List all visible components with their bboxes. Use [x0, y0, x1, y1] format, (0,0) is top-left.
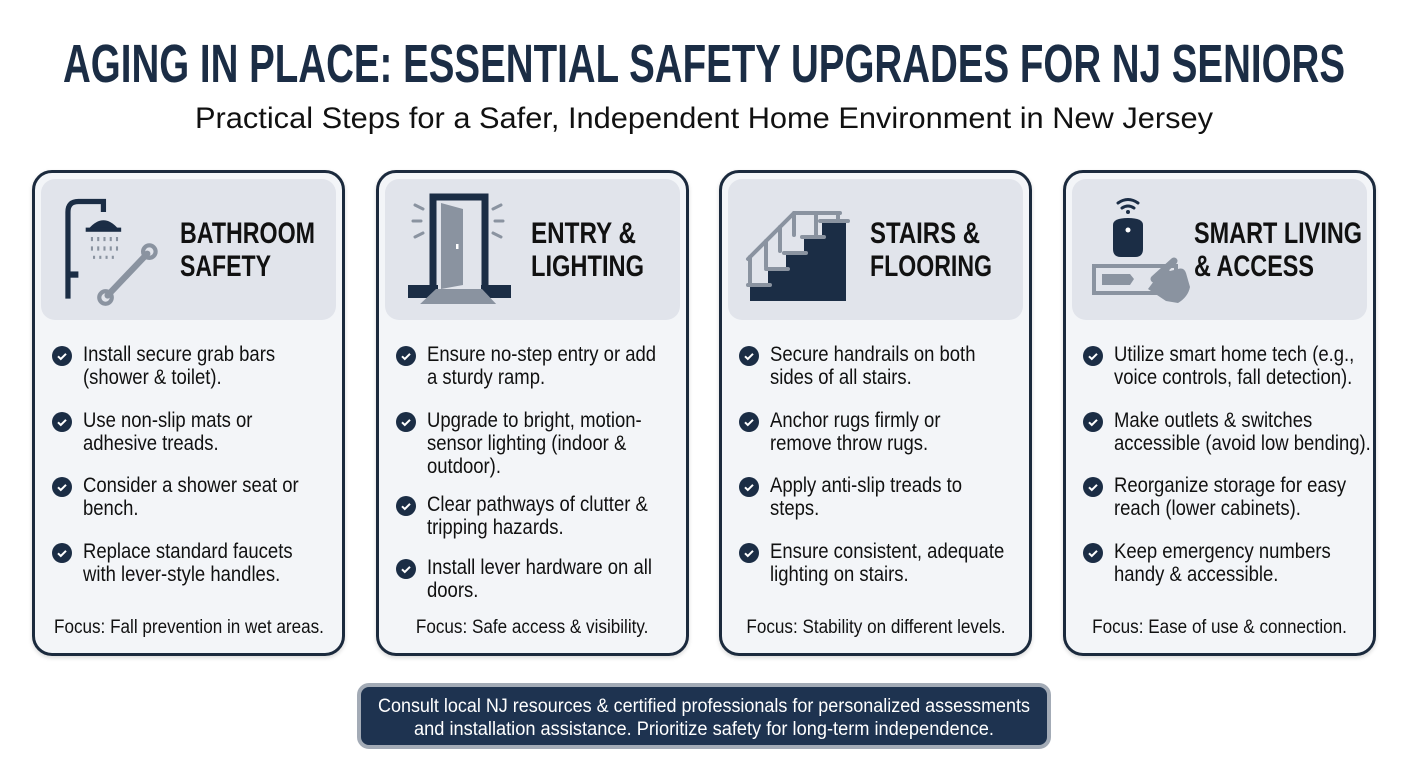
- callout banner: [357, 683, 1051, 749]
- icon: shower and grab bar: [65, 198, 158, 306]
- callout banner: and installation assistance. Prioritize safety for long-term independence.: [414, 719, 994, 740]
- bullet 1: [1083, 343, 1354, 389]
- bullet 1: [739, 343, 975, 389]
- bullet 1: Secure handrails on both: [770, 343, 975, 366]
- heading: bathroom safety: [180, 219, 315, 283]
- title: Practical Steps for a Safer, Independent Home Environment in New Jersey: [195, 102, 1213, 135]
- bullet 3: steps.: [770, 497, 819, 520]
- bullet 2: Anchor rugs firmly or: [770, 409, 940, 432]
- panel header: stairs: [728, 179, 1023, 320]
- bullet 3: Clear pathways of clutter &: [427, 493, 648, 516]
- icon: smart speaker and switch with hand: [1092, 198, 1190, 303]
- bullet 1: [396, 343, 656, 389]
- bullet 2: Use non-slip mats or: [83, 409, 252, 432]
- bullet 3: bench.: [83, 497, 138, 520]
- heading: stairs & flooring: [870, 219, 992, 283]
- bullet 2: Upgrade to bright, motion-: [427, 409, 642, 432]
- bullet 4: with lever-style handles.: [83, 563, 280, 586]
- panel: entry & lighting: [376, 170, 689, 656]
- bullet 2: adhesive treads.: [83, 432, 219, 455]
- bullet 4: Replace standard faucets: [83, 540, 293, 563]
- focus note: Focus: Safe access & visibility.: [416, 617, 649, 638]
- bullet 2: sensor lighting (indoor &: [427, 432, 626, 455]
- bullet 4: doors.: [427, 579, 478, 602]
- panel header: entry: [385, 179, 680, 320]
- callout banner: Consult local NJ resources & certified professionals for personalized assessments: [378, 696, 1030, 717]
- focus note: Focus: Ease of use & connection.: [1092, 617, 1347, 638]
- bullet 1: Install secure grab bars: [83, 343, 275, 366]
- bullet 4: [396, 556, 652, 602]
- bullet 2: accessible (avoid low bending).: [1114, 432, 1371, 455]
- bullet 4: handy & accessible.: [1114, 563, 1278, 586]
- bullet 4: [1083, 540, 1331, 586]
- bullet 3: [396, 493, 648, 539]
- heading: entry & lighting: [531, 219, 644, 283]
- icon: open door with light: [408, 194, 511, 304]
- bullet 4: [739, 540, 1004, 586]
- focus note: Focus: Fall prevention in wet areas.: [54, 617, 323, 638]
- bullet 4: Install lever hardware on all: [427, 556, 652, 579]
- bullet 2: [1083, 409, 1371, 455]
- bullet 1: voice controls, fall detection).: [1114, 366, 1352, 389]
- bullet 1: Ensure no-step entry or add: [427, 343, 656, 366]
- bullet 1: sides of all stairs.: [770, 366, 912, 389]
- bullet 1: (shower & toilet).: [83, 366, 222, 389]
- bullet 4: Keep emergency numbers: [1114, 540, 1331, 563]
- bullet 2: Make outlets & switches: [1114, 409, 1312, 432]
- bullet 3: reach (lower cabinets).: [1114, 497, 1301, 520]
- bullet 3: [1083, 474, 1346, 520]
- bullet 3: Reorganize storage for easy: [1114, 474, 1346, 497]
- bullet 2: [739, 409, 940, 455]
- panel header: bathroom: [41, 179, 336, 320]
- icon: staircase with handrail: [746, 211, 850, 301]
- bullet 3: Apply anti-slip treads to: [770, 474, 962, 497]
- panel: bathroom safety: [32, 170, 345, 656]
- heading: smart living & access: & ACCESS: [1194, 250, 1314, 283]
- bullet 3: tripping hazards.: [427, 516, 564, 539]
- bullet 3: Consider a shower seat or: [83, 474, 299, 497]
- panel header: smart living: [1072, 179, 1367, 320]
- focus note: Focus: Stability on different levels.: [746, 617, 1005, 638]
- bullet 2: [396, 409, 642, 478]
- heading: bathroom safety: SAFETY: [180, 250, 271, 283]
- bullet 1: a sturdy ramp.: [427, 366, 545, 389]
- bullet 3: [739, 474, 962, 520]
- panel: stairs & flooring: [719, 170, 1032, 656]
- title: [63, 34, 1345, 135]
- heading: smart living & access: [1194, 219, 1362, 283]
- bullet 2: remove throw rugs.: [770, 432, 928, 455]
- bullet 1: Utilize smart home tech (e.g.,: [1114, 343, 1354, 366]
- panel: smart living & access: [1063, 170, 1376, 656]
- bullet 4: lighting on stairs.: [770, 563, 909, 586]
- bullet 4: Ensure consistent, adequate: [770, 540, 1004, 563]
- bullet 1: [52, 343, 275, 389]
- bullet 3: [52, 474, 299, 520]
- heading: entry & lighting: LIGHTING: [531, 250, 644, 283]
- bullet 2: outdoor).: [427, 455, 501, 478]
- bullet 4: [52, 540, 293, 586]
- bullet 2: [52, 409, 252, 455]
